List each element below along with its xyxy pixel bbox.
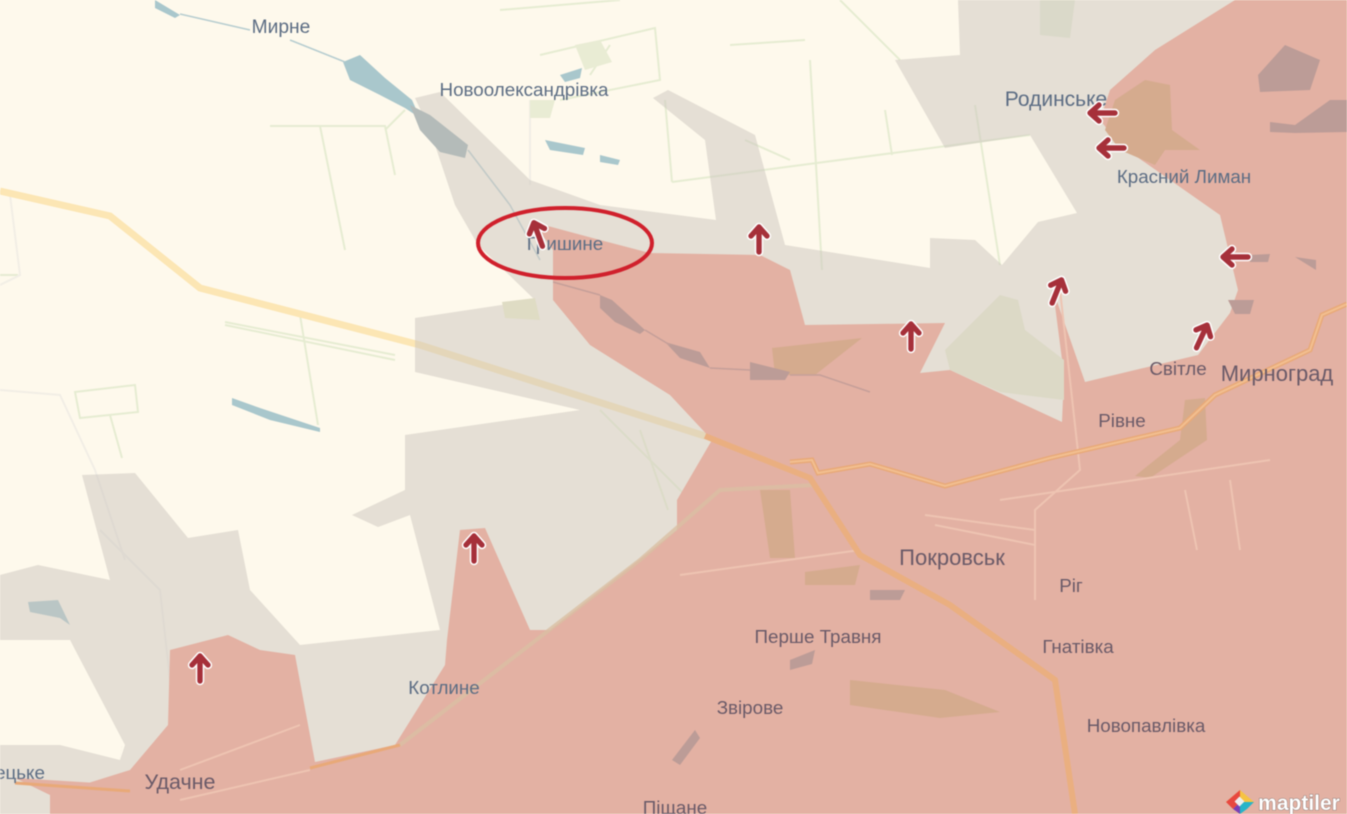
- lakes in red zone: [600, 45, 1347, 765]
- place labels: Гнатівка: [1042, 636, 1114, 657]
- maptiler logo: [1226, 790, 1340, 814]
- place labels: Світле: [1149, 358, 1207, 379]
- railway: [400, 485, 815, 745]
- place labels: Новопавлівка: [1087, 715, 1206, 736]
- place labels: Удачне: [144, 770, 216, 794]
- place labels: Рівне: [1098, 410, 1146, 431]
- green patches: [530, 0, 1075, 118]
- place labels: Звірове: [717, 697, 783, 718]
- place labels: Мирне: [252, 17, 310, 38]
- place labels: Мирноград: [1221, 361, 1333, 386]
- red strip south-west: [15, 778, 130, 795]
- lake over the grey zone: [410, 105, 468, 158]
- place labels: Перше Травня: [755, 626, 881, 647]
- place labels: Красний Лиман: [1117, 166, 1251, 187]
- place labels: Ріг: [1059, 575, 1083, 596]
- darker patches inside the red zone: [760, 80, 1207, 718]
- place labels: Родинське: [1005, 88, 1107, 111]
- green forest: [945, 295, 1064, 400]
- cream pocket west: [0, 640, 122, 760]
- place labels: Гришине: [527, 233, 603, 254]
- place labels: Новоолександрівка: [440, 79, 609, 100]
- place labels: Покровськ: [899, 545, 1005, 570]
- place labels: Котлине: [408, 677, 480, 698]
- minor roads and fields: [0, 0, 1030, 750]
- faint lines in the grey zone: [600, 410, 700, 510]
- lakes and rivers in the north-west: [28, 0, 620, 625]
- roads in red zone: [180, 290, 1270, 800]
- highways over red zone: [790, 304, 1347, 486]
- highway north-west: [0, 191, 705, 436]
- arrows: direction of advance: [192, 105, 1248, 681]
- red ellipse highlighting Hryshyne: [478, 208, 652, 278]
